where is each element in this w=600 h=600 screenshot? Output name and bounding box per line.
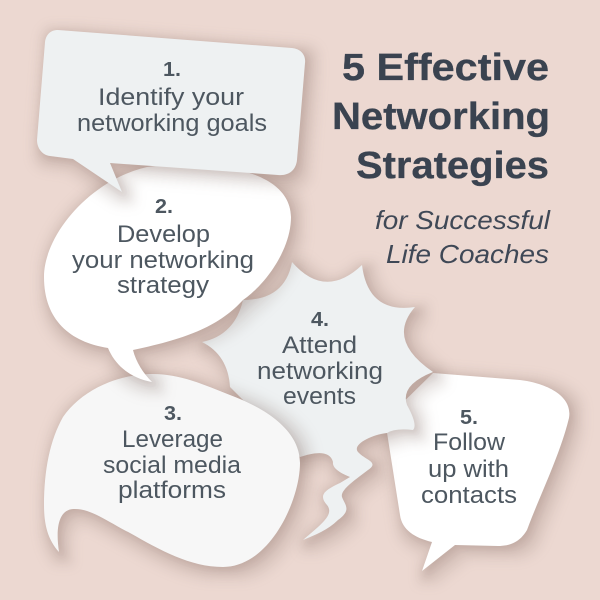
title — [332, 47, 550, 187]
speech bubble 5 shape — [385, 373, 569, 571]
speech bubble 1 shape — [37, 30, 305, 192]
subtitle: Life Coaches — [386, 239, 549, 269]
speech bubble 2 shape — [44, 164, 291, 382]
step 2 text: your networking — [72, 247, 254, 274]
speech bubble 4 shape — [202, 262, 433, 540]
step 3 text: Leverage — [122, 426, 223, 453]
step 5 text — [421, 407, 517, 509]
step 4 text — [257, 309, 383, 410]
step 2 text: Develop — [117, 221, 210, 248]
step 3 text — [103, 403, 242, 504]
step 2 text — [72, 196, 254, 299]
step 5 text: contacts — [421, 482, 517, 509]
step 5 text: Follow — [433, 429, 506, 456]
step 1 text: networking goals — [77, 110, 267, 137]
step 5 text: 5. — [460, 407, 478, 429]
step 1 text: 1. — [163, 59, 181, 81]
speech bubble 3 shape — [44, 374, 300, 567]
title: Strategies — [356, 145, 549, 187]
step 2 text: strategy — [117, 272, 209, 299]
title: Networking — [332, 96, 550, 138]
step 3 text: 3. — [164, 403, 182, 425]
step 1 text: Identify your — [98, 84, 244, 111]
step 4 text: networking — [257, 358, 383, 385]
step 3 text: platforms — [118, 477, 226, 504]
title: 5 Effective — [342, 47, 549, 89]
subtitle: for Successful — [375, 205, 551, 235]
step 3 text: social media — [103, 452, 242, 479]
step 1 text — [77, 59, 267, 137]
step 4 text: 4. — [311, 309, 329, 331]
step 4 text: events — [283, 383, 356, 410]
step 2 text: 2. — [155, 196, 173, 218]
subtitle — [375, 205, 551, 269]
step 5 text: up with — [428, 456, 509, 483]
step 4 text: Attend — [282, 332, 357, 359]
